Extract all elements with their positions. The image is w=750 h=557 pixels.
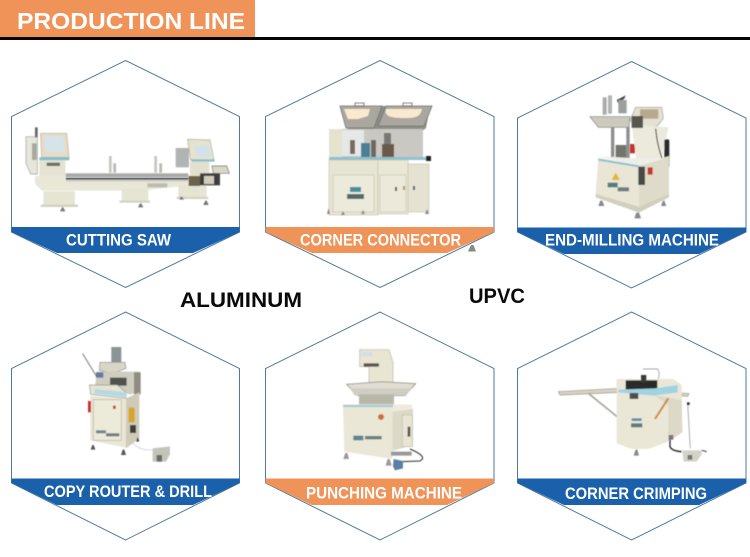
banner: corner connector bbox=[266, 227, 494, 253]
label: upvc: UPVC bbox=[469, 285, 525, 308]
banner: corner crimping: CORNER CRIMPING bbox=[565, 484, 707, 503]
panel: copy router and drill bbox=[12, 312, 240, 540]
banner: punching machine bbox=[266, 478, 494, 505]
machine: corner connector bbox=[327, 103, 432, 215]
banner: end-milling machine: END-MILLING MACHINE bbox=[545, 230, 719, 250]
machine: end-milling bbox=[590, 95, 669, 218]
title: PRODUCTION LINE bbox=[17, 8, 245, 34]
banner: corner connector: CORNER CONNECTOR bbox=[300, 230, 461, 250]
machine: punching bbox=[343, 350, 423, 470]
icon: machine foot bbox=[468, 245, 476, 252]
banner: punching machine: PUNCHING MACHINE bbox=[306, 484, 462, 502]
banner: cutting saw: CUTTING SAW bbox=[66, 230, 172, 250]
banner: copy router and drill bbox=[12, 478, 240, 505]
banner: corner crimping bbox=[518, 478, 746, 505]
panel: punching machine bbox=[266, 312, 494, 540]
panel: corner connector bbox=[266, 60, 494, 288]
label: aluminum: ALUMINUM bbox=[180, 289, 302, 312]
header bbox=[0, 0, 750, 40]
panel: corner crimping bbox=[518, 312, 746, 540]
machine: copy router bbox=[83, 347, 170, 462]
machine: cutting saw bbox=[26, 127, 229, 211]
panel: cutting saw bbox=[12, 60, 240, 288]
banner: copy router and drill: COPY ROUTER & DRILL bbox=[44, 482, 212, 501]
machine: corner crimping bbox=[558, 369, 707, 462]
panel: end-milling machine bbox=[518, 62, 746, 288]
banner: end-milling machine bbox=[518, 228, 746, 254]
banner: cutting saw bbox=[12, 227, 240, 253]
